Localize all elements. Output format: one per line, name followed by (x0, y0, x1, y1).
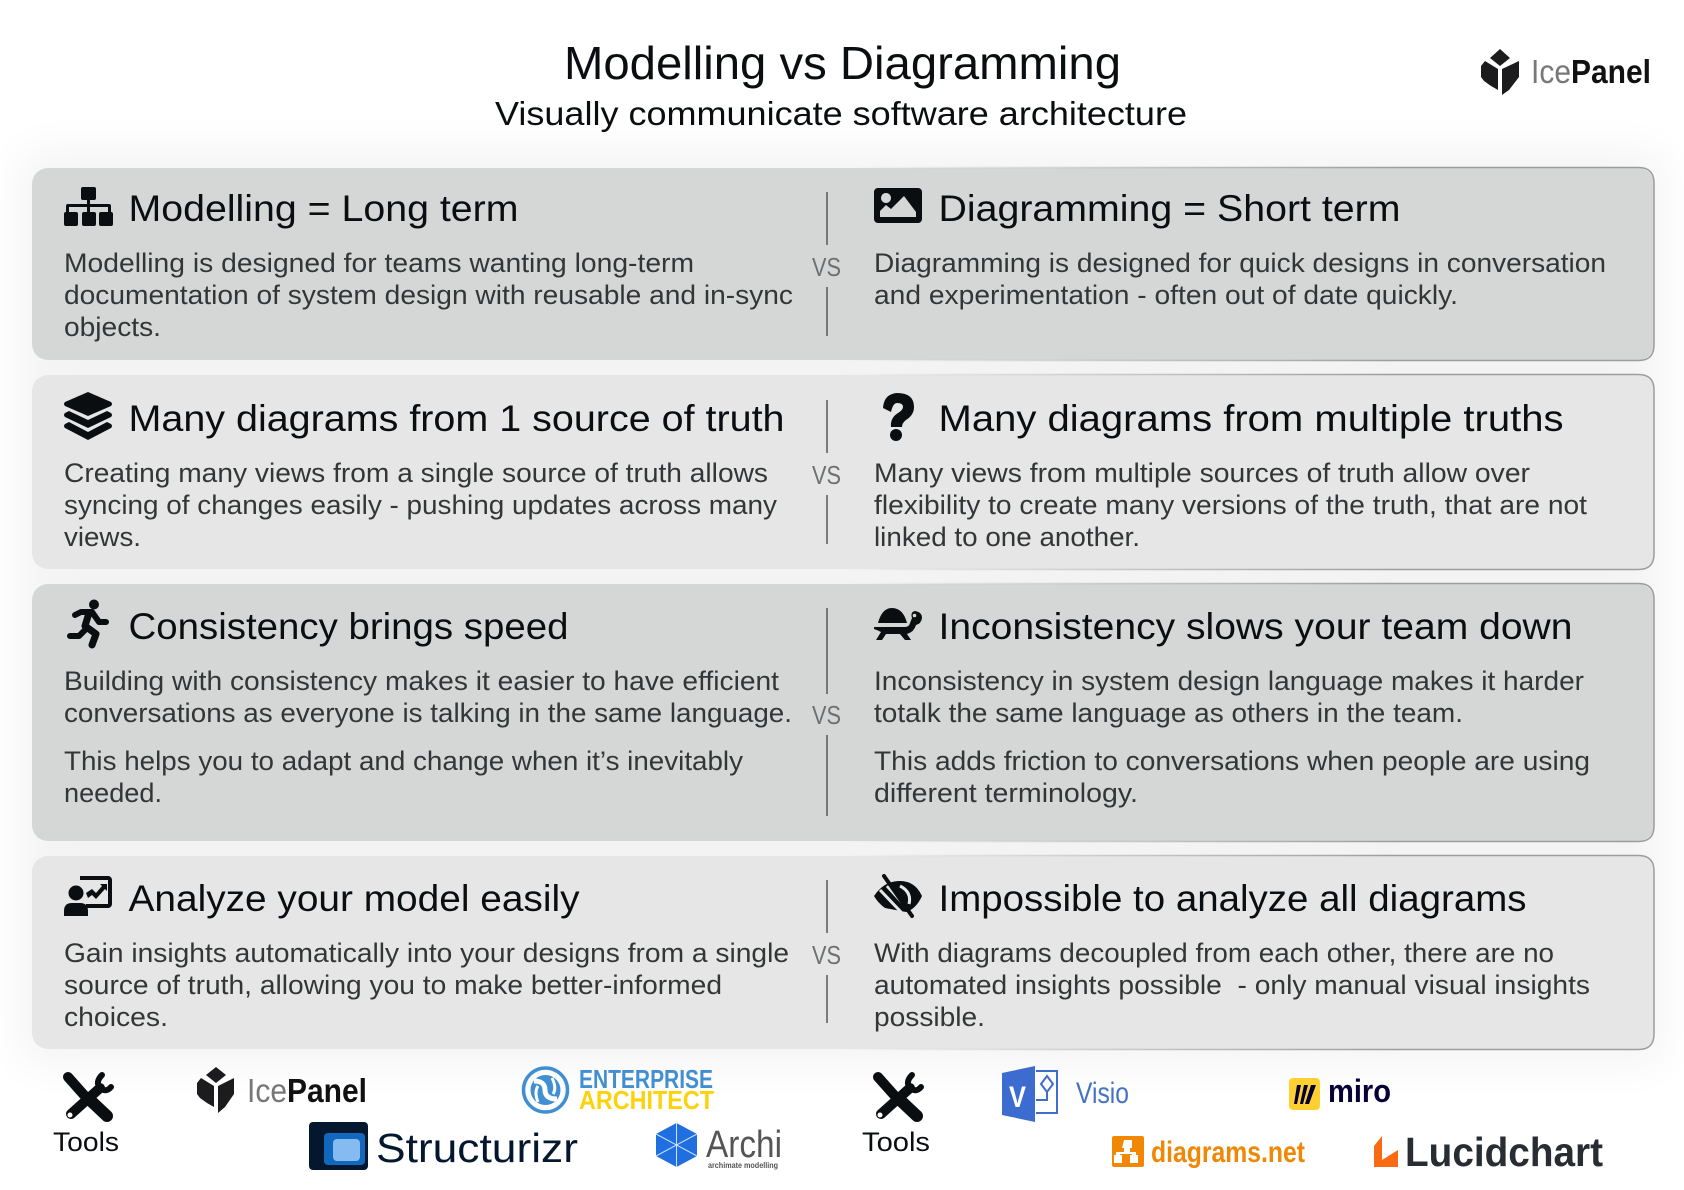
label: tools: Tools (862, 1127, 930, 1157)
body: left: source of truth, allowing you to make better-informed (64, 970, 722, 1000)
icon: sitemap (64, 187, 113, 226)
panel: row 1 (32, 168, 1654, 360)
title: Modelling vs Diagramming (564, 37, 1121, 89)
logo: Archi: Archi (706, 1124, 782, 1166)
body: left: views. (64, 522, 141, 552)
body: left: objects. (64, 312, 161, 342)
body: left: documentation of system design with reusable and in-sync (64, 280, 793, 310)
icon: IcePanel cube (1481, 49, 1519, 95)
body: right: Many views from multiple sources of truth allow over (874, 458, 1530, 488)
body: right (874, 938, 1590, 1032)
heading: left: Consistency brings speed (128, 606, 568, 647)
vs divider: VS (812, 940, 841, 970)
heading: right: Inconsistency slows your team down (938, 606, 1572, 647)
logo: Visio (1002, 1066, 1129, 1122)
logo: IcePanel (197, 1067, 367, 1113)
icon: turtle (874, 608, 922, 640)
icon: runner (70, 600, 106, 645)
logo: Archi (656, 1123, 782, 1170)
logo: IcePanel header (1481, 49, 1651, 95)
body: left: Creating many views from a single source of truth allows (64, 458, 768, 488)
icon: tools (878, 1075, 921, 1118)
body: left: choices. (64, 1002, 168, 1032)
body: left: Modelling is designed for teams wanting long-term (64, 248, 694, 278)
heading: left: Modelling = Long term (128, 188, 518, 229)
body: left: syncing of changes easily - pushing updates across many (64, 490, 778, 520)
body: left: Gain insights automatically into your designs from a single (64, 938, 789, 968)
heading: left: Analyze your model easily (128, 878, 580, 919)
panel: row 3 (32, 584, 1654, 842)
body: left: conversations as everyone is talking in the same language. (64, 698, 792, 728)
icon: tools (68, 1075, 111, 1118)
logo: Enterprise Architect: ARCHITECT (579, 1085, 714, 1115)
body: right: and experimentation - often out of date quickly. (874, 280, 1458, 310)
tools row: modelling (53, 1064, 782, 1171)
heading: right: Impossible to analyze all diagrams (938, 878, 1526, 919)
heading: right: Many diagrams from multiple truths (938, 398, 1564, 439)
icon: eye slash (874, 876, 922, 916)
logo: Structurizr: Structurizr (376, 1125, 578, 1171)
logo: diagrams.net (1112, 1136, 1305, 1169)
body: right (874, 666, 1590, 808)
body: left: This helps you to adapt and change when it’s inevitably (64, 746, 744, 776)
logo: miro (1289, 1073, 1391, 1110)
icon: question mark (883, 393, 914, 441)
panel: row 2 (32, 374, 1654, 570)
logo: IcePanel: IcePanel (247, 1072, 367, 1109)
body: right: linked to one another. (874, 522, 1140, 552)
heading: right: Diagramming = Short term (938, 188, 1400, 229)
logo text: IcePanel (1531, 53, 1651, 90)
body: left (64, 666, 792, 808)
body: left: needed. (64, 778, 162, 808)
logo: diagrams.net: diagrams.net (1151, 1136, 1305, 1169)
body: right: automated insights possible - only manual visual insights (874, 970, 1590, 1000)
body: left (64, 938, 789, 1032)
body: left (64, 248, 793, 342)
logo: Archi: archimate modelling (708, 1161, 778, 1170)
vs divider: VS (812, 460, 841, 490)
vs divider: VS (812, 252, 841, 282)
logo: Structurizr (309, 1122, 578, 1171)
tools row: diagramming (862, 1066, 1603, 1175)
label: tools: Tools (53, 1127, 119, 1157)
soft panel shadow (20, 150, 1664, 1065)
heading: left: Many diagrams from 1 source of truth (128, 398, 784, 439)
body: right: flexibility to create many versions of the truth, that are not (874, 490, 1588, 520)
vs divider: VS (812, 700, 841, 730)
logo: Lucidchart: Lucidchart (1405, 1129, 1603, 1175)
panel: row 4 (32, 856, 1654, 1050)
logo: Enterprise Architect: ENTERPRISE (579, 1064, 713, 1094)
body: left: Building with consistency makes it easier to have efficient (64, 666, 780, 696)
body: right: totalk the same language as others in the team. (874, 698, 1463, 728)
body: right: Inconsistency in system design language makes it harder (874, 666, 1584, 696)
logo: Visio: V (1009, 1081, 1026, 1114)
body: right (874, 248, 1606, 310)
icon: image (874, 188, 922, 223)
body: right: different terminology. (874, 778, 1138, 808)
logo: miro: miro (1328, 1073, 1391, 1109)
body: right: This adds friction to conversations when people are using (874, 746, 1590, 776)
body: right (874, 458, 1588, 552)
body: right: possible. (874, 1002, 985, 1032)
body: right: Diagramming is designed for quick designs in conversation (874, 248, 1606, 278)
body: right: With diagrams decoupled from each other, there are no (874, 938, 1554, 968)
icon: layers (64, 392, 112, 440)
logo: Visio: Visio (1076, 1077, 1129, 1110)
subtitle: Visually communicate software architecture (495, 95, 1187, 132)
icon: presenter chart (64, 876, 112, 916)
logo: Enterprise Architect (524, 1064, 714, 1115)
body: left (64, 458, 778, 552)
